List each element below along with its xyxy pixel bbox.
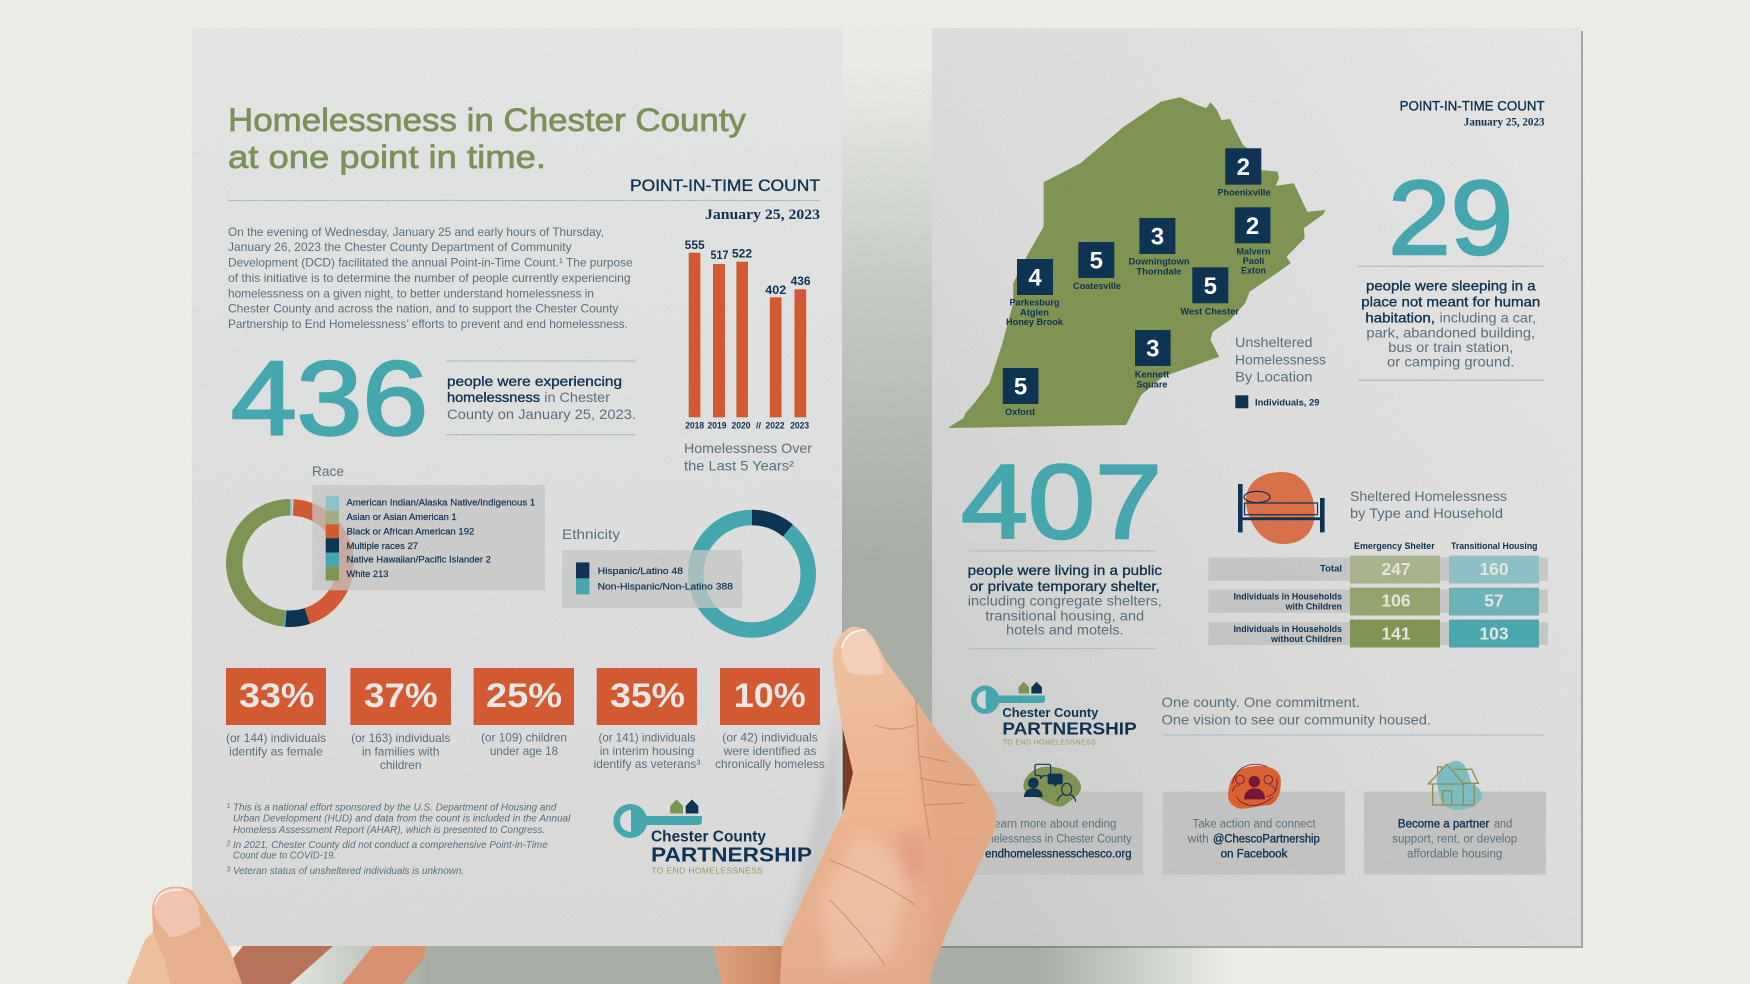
Malvern Paoli Exton count: Malvern — [1236, 246, 1271, 256]
title — [228, 102, 746, 175]
heading: point-in-time count: January 25, 2023 — [1464, 116, 1545, 128]
Parkesburg Atglen Honey Brook count: Parkesburg — [1010, 298, 1060, 308]
card: become a partner: and — [1494, 818, 1512, 830]
ethnicity legend: Hispanic/Latino 48 — [598, 566, 683, 577]
436 description: in Chester — [544, 389, 610, 405]
table: sheltered homelessness: with Children — [1285, 601, 1342, 612]
stat: 33%: 33% — [239, 677, 314, 715]
West Chester count — [1180, 267, 1239, 316]
bar chart caption: the Last 5 Years² — [684, 458, 794, 474]
stat: 35%: identify as veterans³ — [594, 757, 700, 771]
stat: 37%: in families with — [362, 744, 440, 758]
footnotes: 2 — [226, 840, 230, 848]
Coatesville count: 5 — [1090, 248, 1103, 275]
card: take action: Take action and connect — [1192, 818, 1316, 830]
436 description: people were experiencing — [447, 373, 622, 389]
map caption and legend — [1235, 334, 1326, 409]
logo: Chester County Partnership: Chester County — [1002, 705, 1099, 720]
ethnicity legend: Non-Hispanic/Non-Latino 388 — [598, 581, 733, 592]
logo: Chester County Partnership: PARTNERSHIP — [651, 844, 812, 866]
sheltered heading: Sheltered Homelessness — [1350, 488, 1507, 504]
29 description: bus or train station, — [1388, 339, 1513, 355]
footnotes: This is a national effort sponsored by the U.S. Department of Housing and — [233, 802, 557, 813]
big number 436: 436 — [231, 340, 428, 458]
card: become a partner: support, rent, or develop — [1392, 833, 1517, 845]
stat: 10% — [715, 668, 825, 771]
intro paragraph: homelessness on a given night, to better understand homelessness in — [228, 286, 594, 300]
stat: 25%: under age 18 — [490, 744, 558, 758]
436 description: homelessness — [447, 389, 540, 405]
heading: point-in-time count: POINT-IN-TIME COUNT — [1400, 99, 1545, 114]
stat: 10%: (or 42) individuals — [722, 730, 818, 744]
29 description: habitation, — [1365, 310, 1435, 326]
tagline — [1162, 694, 1544, 735]
Parkesburg Atglen Honey Brook count: Atglen — [1020, 307, 1049, 317]
table: sheltered homelessness: Emergency Shelter — [1354, 541, 1435, 552]
Oxford count: Oxford — [1005, 407, 1035, 417]
table: sheltered homelessness: Transitional Housing — [1451, 541, 1538, 552]
stat: 10%: chronically homeless — [715, 757, 825, 771]
race legend: White 213 — [346, 569, 388, 580]
stat: 37%: 37% — [364, 677, 438, 715]
stat: 37%: children — [380, 758, 422, 772]
stat: 35%: (or 141) individuals — [598, 730, 696, 744]
bar chart caption: Homelessness Over — [684, 440, 812, 456]
icon: house — [1428, 761, 1482, 810]
29 description: park, abandoned building, — [1366, 324, 1535, 340]
bar chart: homelessness over 5 years: 2018 — [685, 421, 704, 431]
race legend: Black or African American 192 — [346, 526, 474, 538]
West Chester count: West Chester — [1180, 306, 1239, 316]
map count boxes and places — [1003, 148, 1271, 417]
map of Chester County — [949, 97, 1326, 428]
footnotes: 3 — [226, 867, 230, 874]
Parkesburg Atglen Honey Brook count — [1006, 259, 1064, 327]
bar chart: homelessness over 5 years: 2020 — [732, 421, 750, 431]
Downingtown Thorndale count: Thorndale — [1136, 266, 1182, 276]
card: become a partner: Become a partner — [1398, 818, 1490, 830]
panel: right page — [932, 28, 1583, 948]
table: sheltered homelessness: 160 — [1479, 559, 1509, 579]
map caption and legend: Unsheltered — [1235, 334, 1312, 350]
footnotes: 1 — [226, 803, 230, 810]
intro paragraph: Development (DCD) facilitated the annual Point-in-Time Count.¹ The purpose — [228, 256, 633, 270]
stat: 35% — [594, 668, 700, 771]
logo: Chester County Partnership: TO END HOMELESSNESS — [1003, 739, 1096, 747]
stat: 10%: were identified as — [723, 744, 816, 758]
29 description: including a car, — [1440, 310, 1536, 326]
407 description: people were living in a public — [968, 562, 1162, 578]
race legend: Native Hawaiian/Pacific Islander 2 — [346, 555, 491, 566]
436 description — [446, 361, 636, 435]
table: sheltered homelessness: Total — [1320, 564, 1342, 575]
heading: point-in-time count — [1400, 99, 1545, 128]
logo: Chester County Partnership — [971, 682, 1137, 747]
Coatesville count: Coatesville — [1073, 281, 1121, 291]
West Chester count: 5 — [1204, 273, 1217, 300]
stat: 25%: 25% — [486, 677, 562, 715]
map caption and legend: By Location — [1235, 369, 1312, 385]
race legend: Asian or Asian American 1 — [346, 512, 457, 523]
Kennett Square count: 3 — [1146, 336, 1159, 363]
Parkesburg Atglen Honey Brook count: 4 — [1028, 265, 1042, 292]
card: become a partner — [1364, 792, 1546, 875]
Downingtown Thorndale count: Downingtown — [1128, 257, 1190, 267]
footnotes: In 2021, Chester County did not conduct a comprehensive Point-in-Time — [233, 840, 548, 851]
footnotes — [226, 802, 571, 877]
intro paragraph: On the evening of Wednesday, January 25 and early hours of Thursday, — [228, 225, 604, 239]
card: take action — [1163, 792, 1345, 875]
table: sheltered homelessness: Individuals in Households — [1234, 592, 1342, 602]
footnotes: Homeless Assessment Report (AHAR), which is presented to Congress. — [233, 825, 545, 836]
Phoenixville count — [1218, 148, 1270, 197]
Oxford count — [1003, 368, 1038, 417]
right hand holding pages — [780, 627, 1000, 984]
stat: 37% — [350, 668, 451, 772]
ethnicity heading: Ethnicity — [562, 526, 620, 542]
bar chart: homelessness over 5 years: 522 — [732, 249, 752, 261]
stat: 33%: (or 144) individuals — [226, 731, 326, 745]
map caption and legend: Homelessness — [1235, 351, 1326, 367]
left hand thumb — [127, 887, 242, 984]
intro paragraph — [228, 225, 633, 331]
tagline: One county. One commitment. — [1162, 694, 1360, 710]
Kennett Square count: Square — [1136, 379, 1168, 389]
logo: Chester County Partnership: Chester County — [651, 829, 766, 846]
bar chart: homelessness over 5 years: 555 — [685, 240, 705, 252]
footnotes: Veteran status of unsheltered individuals is unknown. — [233, 866, 464, 877]
table: sheltered homelessness: without Children — [1270, 634, 1342, 645]
407 description — [968, 551, 1162, 649]
table: sheltered homelessness: 247 — [1381, 559, 1411, 579]
Coatesville count — [1073, 242, 1121, 291]
Parkesburg Atglen Honey Brook count: Honey Brook — [1006, 317, 1064, 327]
407 description: or private temporary shelter, — [970, 578, 1160, 594]
fingers behind left page — [233, 944, 783, 984]
Downingtown Thorndale count — [1128, 218, 1190, 276]
heading: point-in-time count: January 25, 2023 — [705, 207, 820, 223]
right paper sheet — [932, 28, 1583, 948]
icon: bed — [1238, 472, 1325, 544]
icon: community group — [1228, 764, 1281, 809]
Oxford count: 5 — [1014, 374, 1027, 401]
title: Homelessness in Chester County — [228, 102, 746, 138]
footnotes: Count due to COVID-19. — [233, 851, 336, 862]
Downingtown Thorndale count: 3 — [1151, 224, 1164, 251]
stat: 25% — [474, 668, 574, 758]
407 description: including congregate shelters, — [968, 593, 1162, 609]
stat: 33% — [226, 668, 326, 758]
sheltered heading: by Type and Household — [1350, 505, 1503, 521]
intro paragraph: January 26, 2023 the Chester County Department of Community — [228, 240, 572, 254]
table: sheltered homelessness: 106 — [1381, 591, 1411, 611]
table: sheltered homelessness: 57 — [1484, 591, 1504, 611]
heading: point-in-time count: POINT-IN-TIME COUNT — [630, 176, 820, 195]
stat: 33%: identify as female — [229, 744, 323, 758]
29 description: people were sleeping in a — [1366, 277, 1536, 293]
bar chart: homelessness over 5 years — [685, 240, 811, 431]
stat: 10%: 10% — [734, 677, 806, 715]
bar chart: homelessness over 5 years: 2019 — [708, 421, 726, 431]
Malvern Paoli Exton count: 2 — [1246, 213, 1259, 240]
stat: 37%: (or 163) individuals — [351, 731, 450, 745]
card: learn more: homelessness in Chester County — [972, 833, 1132, 845]
29 description — [1358, 266, 1544, 380]
Malvern Paoli Exton count: Paoli — [1243, 256, 1264, 266]
intro paragraph: Chester County and across the nation, and to support the Chester County — [228, 302, 618, 316]
title: at one point in time. — [228, 139, 546, 175]
Malvern Paoli Exton count — [1235, 207, 1271, 276]
race legend: Multiple races 27 — [346, 541, 418, 552]
table: sheltered homelessness: 103 — [1479, 623, 1509, 643]
ethnicity legend — [562, 550, 742, 608]
29 description: place not meant for human — [1361, 294, 1540, 310]
heading: point-in-time count — [228, 176, 820, 223]
stat: 35%: 35% — [610, 677, 685, 715]
table: sheltered homelessness: Individuals in Households — [1234, 624, 1342, 635]
card: become a partner: affordable housing — [1407, 849, 1502, 861]
29 description: or camping ground. — [1387, 354, 1515, 370]
panel: left page — [192, 28, 842, 946]
intro paragraph: Partnership to End Homelessness’ efforts to prevent and end homelessness. — [228, 317, 628, 331]
card: learn more — [961, 792, 1143, 875]
paper texture overlay — [192, 28, 1581, 946]
bar chart: homelessness over 5 years: 436 — [791, 276, 811, 288]
407 description: transitional housing, and — [985, 607, 1144, 623]
big number 407: 407 — [961, 444, 1162, 561]
big number 29: 29 — [1388, 160, 1513, 277]
left paper sheet — [192, 28, 842, 946]
background with cast shadow — [290, 112, 1206, 984]
card: take action: on Facebook — [1221, 849, 1288, 861]
card: learn more: at endhomelessnesschesco.org — [972, 849, 1132, 861]
bar chart: homelessness over 5 years: 2023 — [790, 421, 809, 431]
Kennett Square count — [1135, 330, 1171, 389]
intro paragraph: of this initiative is to determine the number of people currently experiencing — [228, 271, 631, 285]
logo: Chester County Partnership: PARTNERSHIP — [1002, 720, 1137, 739]
bar chart caption — [684, 440, 812, 474]
table: sheltered homelessness — [1208, 541, 1548, 648]
race donut chart — [234, 507, 346, 619]
Phoenixville count: Phoenixville — [1218, 187, 1270, 197]
bar chart: homelessness over 5 years: // — [756, 421, 761, 431]
card: take action: with — [1187, 833, 1209, 845]
stat: 35%: in interim housing — [600, 744, 694, 758]
card: take action: @ChescoPartnership — [1213, 833, 1320, 845]
logo: Chester County Partnership: TO END HOMELESSNESS — [651, 866, 763, 876]
map caption and legend: Individuals, 29 — [1255, 398, 1319, 409]
Malvern Paoli Exton count: Exton — [1241, 266, 1266, 276]
logo: Chester County Partnership — [613, 800, 812, 876]
table: sheltered homelessness: 141 — [1381, 623, 1411, 643]
icon: people talking — [1023, 764, 1081, 807]
ethnicity donut chart — [696, 518, 808, 630]
sheltered heading — [1350, 488, 1507, 521]
bar chart: homelessness over 5 years: 402 — [765, 285, 786, 297]
Phoenixville count: 2 — [1237, 154, 1250, 181]
race legend — [312, 485, 545, 590]
bar chart: homelessness over 5 years: 517 — [710, 250, 728, 262]
407 description: hotels and motels. — [1006, 622, 1124, 638]
436 description: County on January 25, 2023. — [447, 406, 636, 422]
card: learn more: Learn more about ending — [988, 818, 1116, 830]
Kennett Square count: Kennett — [1135, 369, 1169, 379]
footnotes: Urban Development (HUD) and data from the count is included in the Annual — [233, 814, 571, 825]
bar chart: homelessness over 5 years: 2022 — [766, 421, 784, 431]
tagline: One vision to see our community housed. — [1162, 712, 1431, 728]
stat: 25%: (or 109) children — [481, 730, 567, 744]
race legend: American Indian/Alaska Native/Indigenous 1 — [346, 498, 535, 508]
race heading: Race — [312, 463, 344, 479]
